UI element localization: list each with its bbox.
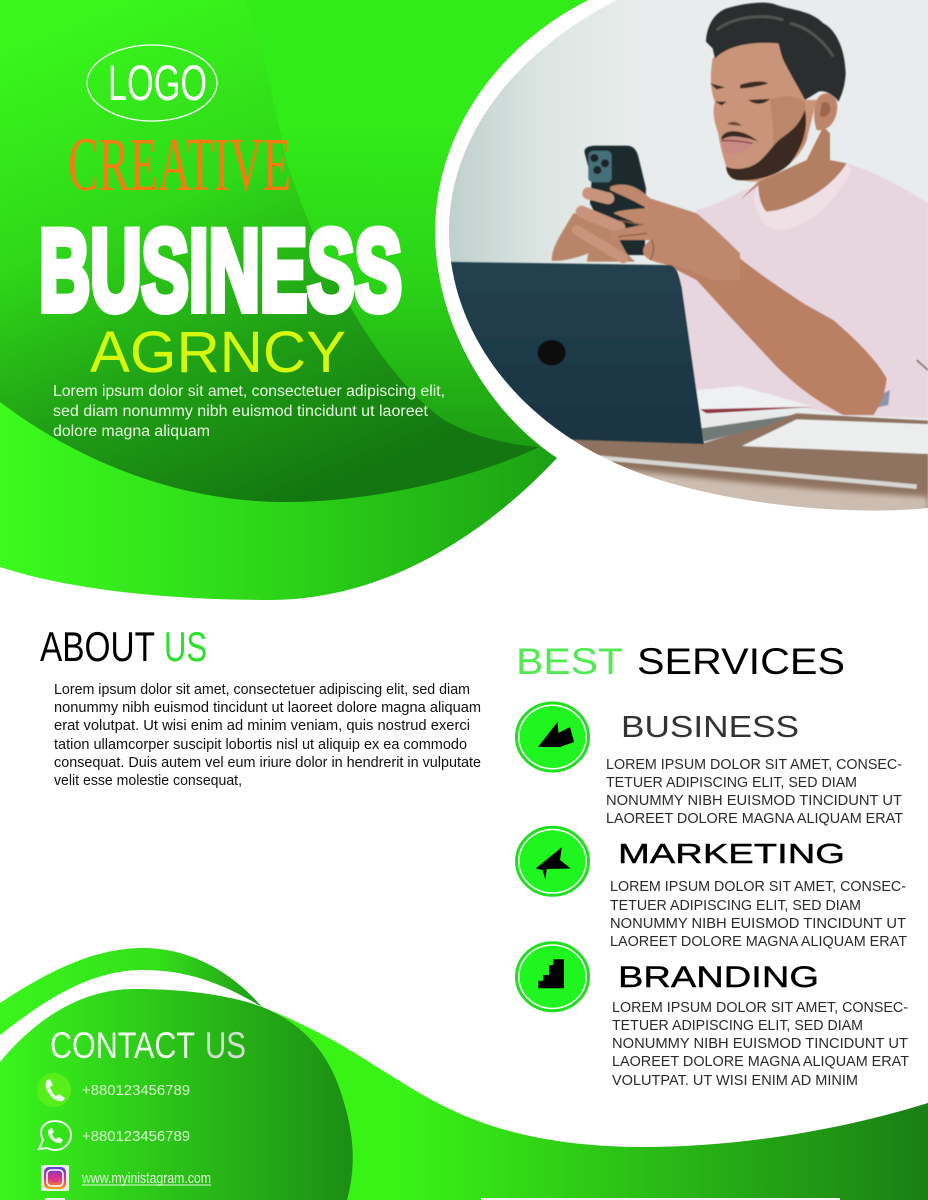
- hands and phone, drawn in hand crop coordinates: [552, 146, 740, 280]
- about us paragraph: Lorem ipsum dolor sit amet, consectetuer adipiscing elit, sed diam: [54, 682, 470, 698]
- about us paragraph: tation ullamcorper suscipit lobortis nisl ut aliquip ex ea commodo: [54, 737, 467, 753]
- laptop lid: [430, 262, 704, 444]
- service: marketing: [516, 827, 907, 950]
- footer wave: [262, 1007, 928, 1200]
- ear: [814, 93, 837, 130]
- contact panel: [0, 989, 353, 1200]
- phone camera: [588, 151, 612, 182]
- header intro text: [53, 383, 445, 440]
- right hand: [610, 184, 740, 280]
- service: branding: [516, 943, 909, 1089]
- service: marketing: LAOREET DOLORE MAGNA ALIQUAM ERAT: [610, 934, 907, 950]
- icon: branding: [516, 943, 588, 1011]
- lips: [722, 136, 753, 154]
- icon: instagram: [41, 1165, 69, 1191]
- top green header shape: [0, 0, 588, 600]
- beard: [726, 110, 806, 180]
- icon: marketing: [516, 827, 588, 895]
- service: marketing: LOREM IPSUM DOLOR SIT AMET, CONSEC-: [610, 879, 906, 895]
- service: branding: LAOREET DOLORE MAGNA ALIQUAM ERAT: [612, 1054, 909, 1070]
- phone body: [584, 146, 646, 255]
- service: branding: TETUER ADIPISCING ELIT, SED DIAM: [612, 1018, 863, 1034]
- about us paragraph: nonummy nibh euismod tincidunt ut laoreet dolore magna aliquam: [54, 700, 481, 716]
- laptop logo dot: [538, 340, 566, 365]
- laptop base: [702, 415, 793, 442]
- heading: best services: [516, 641, 845, 682]
- about us paragraph: consequat. Duis autem vel eum iriure dolor in hendrerit in vulputate: [54, 755, 481, 771]
- footer bottom white bar: [481, 1198, 840, 1200]
- cheek shade: [770, 96, 807, 150]
- service: business: TETUER ADIPISCING ELIT, SED DIAM: [606, 775, 857, 791]
- footer upper arc: [0, 948, 262, 1035]
- heading: business: BUSINESS: [39, 207, 402, 335]
- header intro text: Lorem ipsum dolor sit amet, consectetuer adipiscing elit,: [53, 383, 445, 400]
- about us paragraph: erat volutpat. Ut wisi enim ad minim veniam, quis nostrud exerci: [54, 718, 470, 734]
- phone number one: +880123456789: [82, 1082, 190, 1099]
- service: branding: NONUMMY NIBH EUISMOD TINCIDUNT UT: [612, 1036, 908, 1052]
- header intro text: dolore magna aliquam: [53, 423, 210, 440]
- about us paragraph: velit esse molestie consequat,: [54, 773, 242, 789]
- logo badge: [87, 45, 217, 121]
- service: business: BUSINESS: [621, 709, 799, 744]
- face: [711, 43, 817, 182]
- photo: man with phone and laptop: [430, 0, 928, 520]
- left hand: [552, 213, 635, 262]
- heading: agency: AGRNCY: [90, 320, 346, 385]
- mustache: [722, 131, 758, 142]
- service: marketing: TETUER ADIPISCING ELIT, SED DIAM: [610, 898, 861, 914]
- notebook: [697, 386, 813, 412]
- heading: contact us: CONTACT: [50, 1025, 195, 1066]
- shirt: [678, 163, 928, 418]
- heading: about us: US: [164, 623, 207, 670]
- logo badge: LOGO: [108, 55, 207, 111]
- icon: partial footer icon: [45, 1198, 65, 1200]
- heading: best services: SERVICES: [637, 641, 845, 682]
- service: branding: VOLUTPAT. UT WISI ENIM AD MINIM: [612, 1073, 858, 1089]
- service: business: LAOREET DOLORE MAGNA ALIQUAM ERAT: [606, 811, 903, 827]
- icon: business: [516, 703, 588, 771]
- head, drawn in face crop coordinates: [706, 3, 846, 182]
- service: marketing: MARKETING: [618, 838, 845, 869]
- paper: [742, 419, 928, 454]
- icon: phone: [37, 1073, 71, 1107]
- service: branding: BRANDING: [618, 961, 819, 994]
- service: business: [516, 703, 903, 827]
- header intro text: sed diam nonummy nibh euismod tincidunt ut laoreet: [53, 403, 429, 420]
- heading: creative: CREATIVE: [68, 123, 291, 207]
- website link: www.myinistagram.com: [81, 1170, 211, 1187]
- heading: about us: ABOUT: [40, 623, 155, 670]
- table: [572, 412, 928, 508]
- service: marketing: NONUMMY NIBH EUISMOD TINCIDUNT UT: [610, 916, 906, 932]
- heading: contact us: US: [205, 1025, 246, 1066]
- eyebrows: [710, 82, 768, 89]
- service: business: NONUMMY NIBH EUISMOD TINCIDUNT UT: [606, 793, 902, 809]
- icon: whatsapp: [39, 1121, 71, 1150]
- service: business: LOREM IPSUM DOLOR SIT AMET, CONSEC-: [606, 757, 902, 773]
- hair: [706, 3, 846, 102]
- phone number two: +880123456789: [82, 1128, 190, 1145]
- neck: [740, 127, 847, 212]
- arm: [664, 258, 888, 416]
- eyes: [715, 99, 770, 105]
- heading: best services: BEST: [516, 641, 623, 682]
- service: branding: LOREM IPSUM DOLOR SIT AMET, CONSEC-: [612, 1000, 908, 1016]
- about us paragraph: [54, 682, 481, 789]
- nose shadow: [727, 122, 742, 126]
